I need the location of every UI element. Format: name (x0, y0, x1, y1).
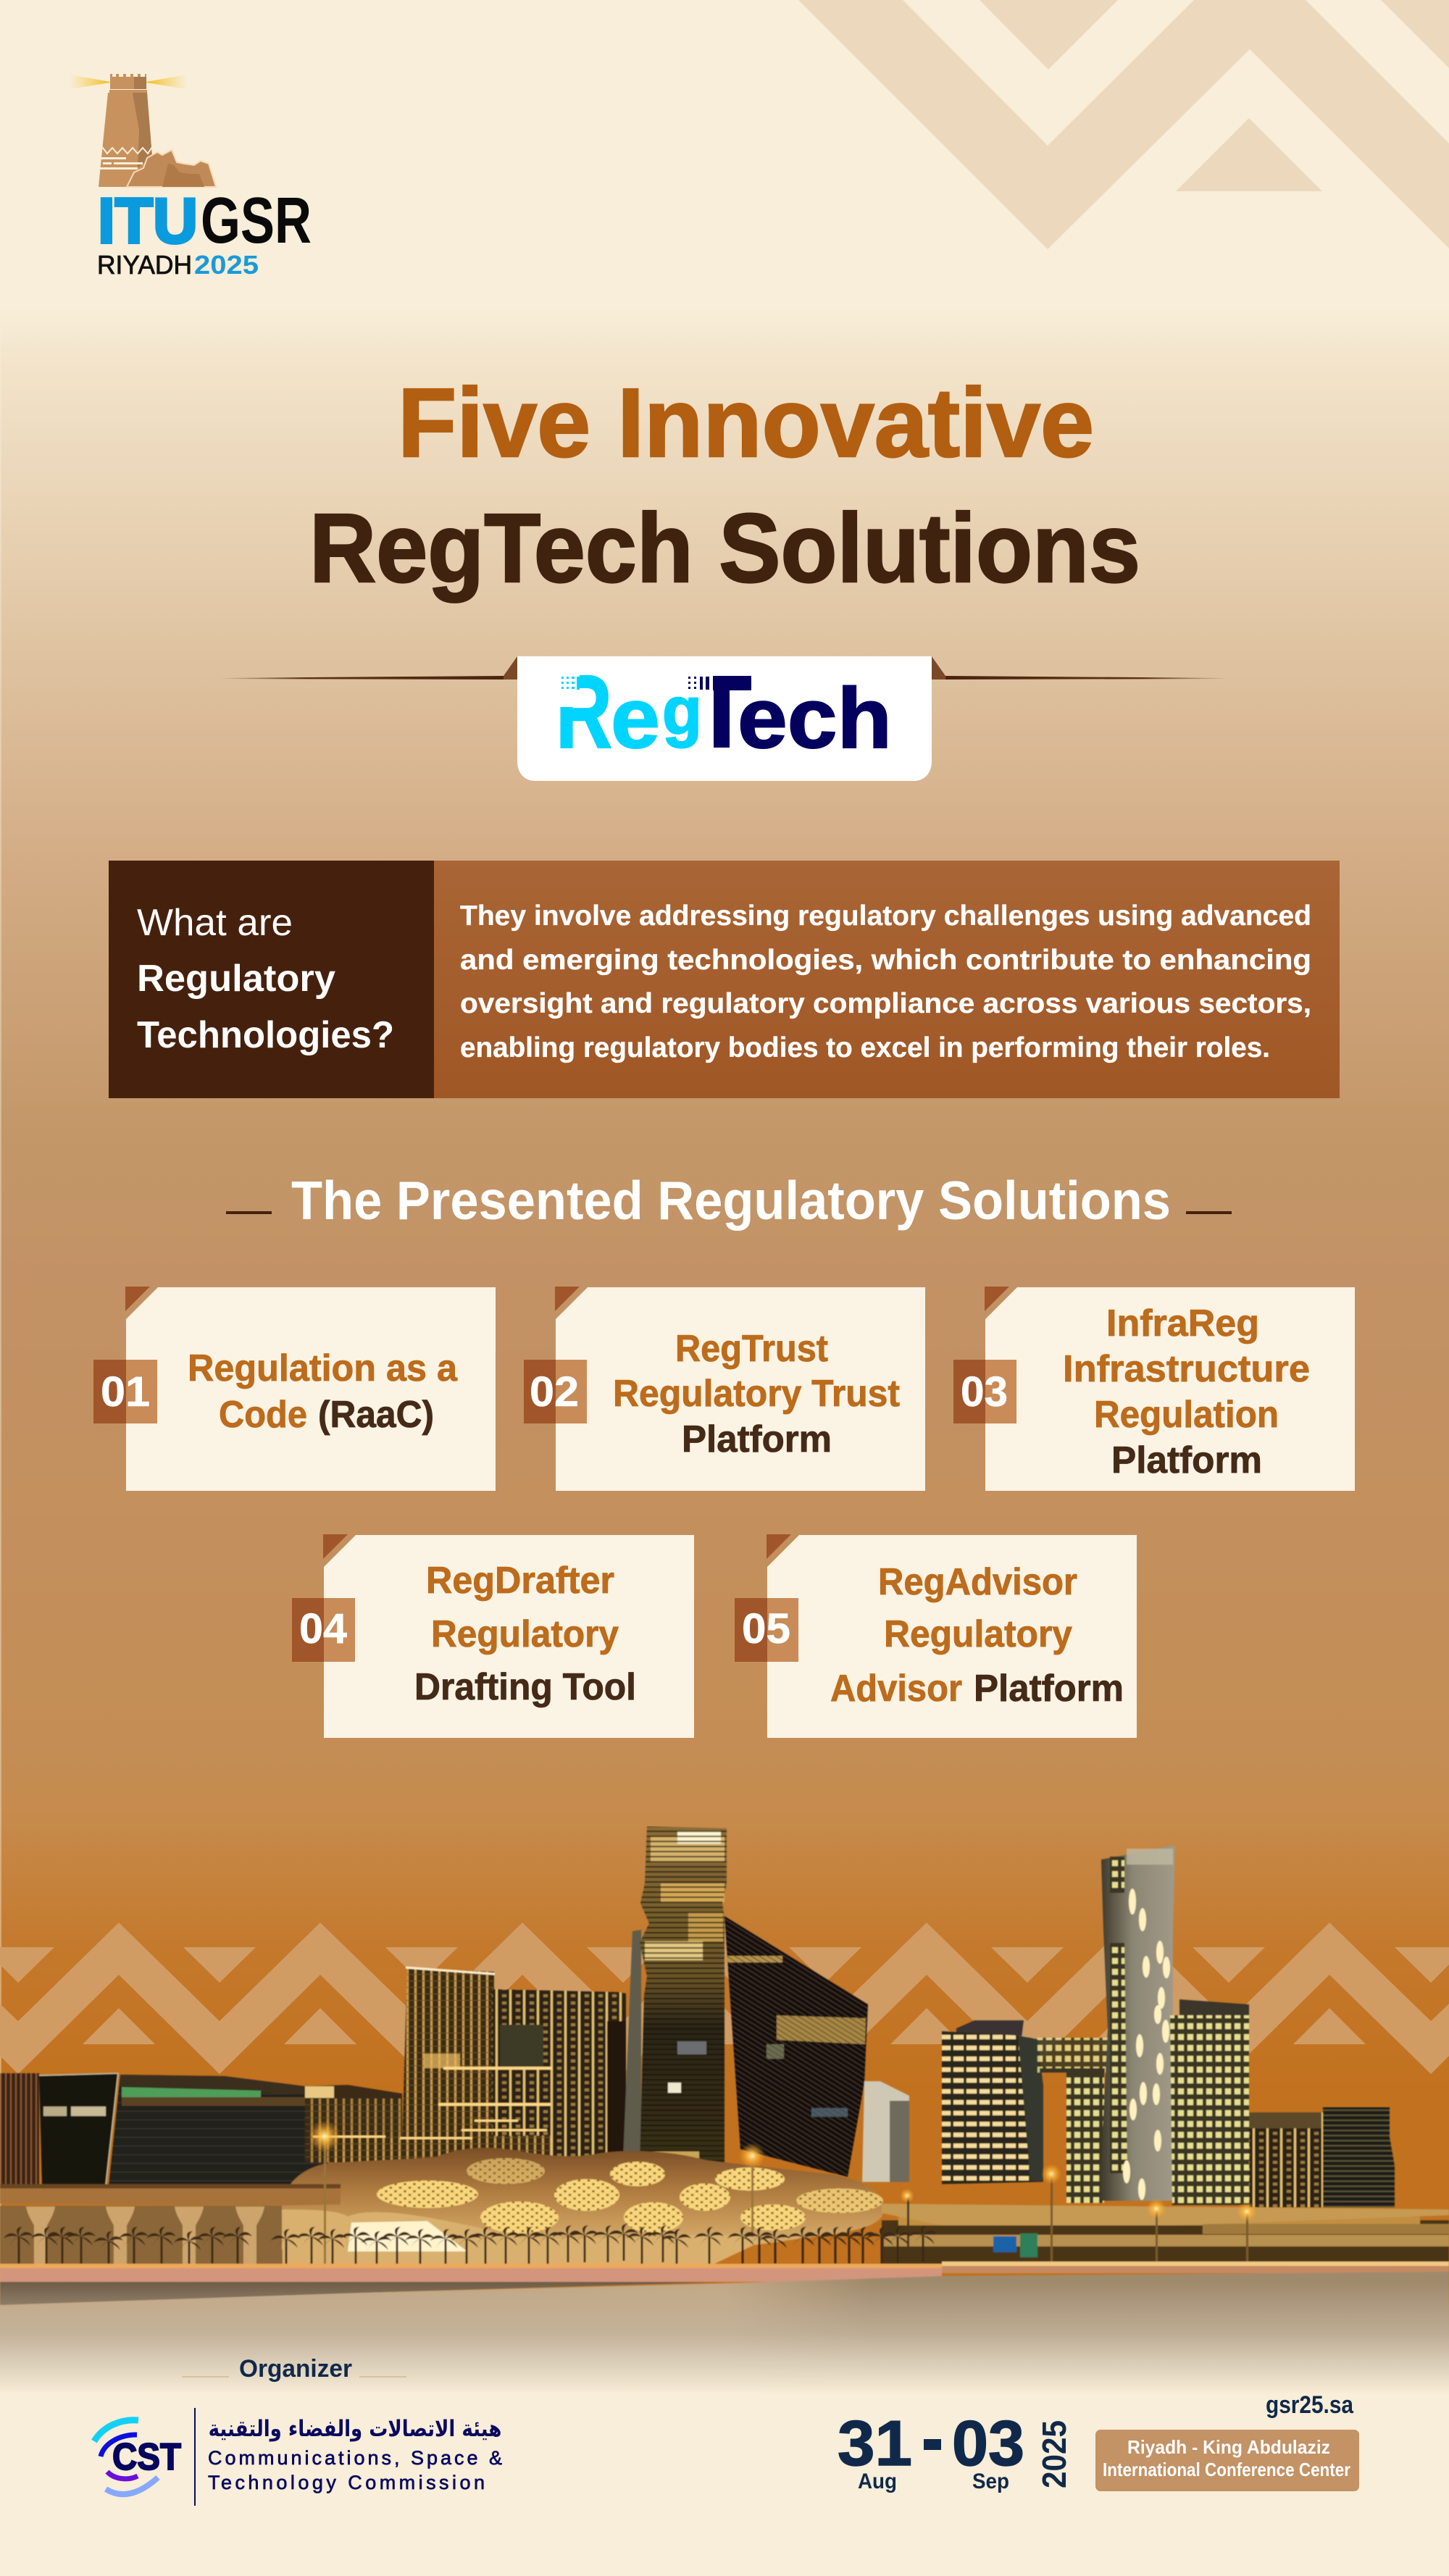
card text (1063, 1302, 1310, 1481)
card text (613, 1328, 900, 1460)
pale office block (862, 2081, 909, 2182)
card 02 (524, 1287, 925, 1491)
definition text: enabling regulatory bodies to excel in performing their roles. (460, 1032, 1270, 1063)
card text (830, 1561, 1124, 1710)
title line 1: Five Innovative (398, 368, 1094, 477)
RegTech logo tab (220, 653, 1228, 781)
logo: ITU GSR Riyadh 2025 (70, 74, 312, 280)
low right buildings (1249, 2107, 1395, 2207)
venue badge: Riyadh - King Abdulaziz (1127, 2436, 1330, 2458)
panel: what are regulatory technologies (109, 861, 1340, 1098)
road signs (993, 2233, 1037, 2257)
event date (838, 2407, 1073, 2493)
card text: RegDrafter (426, 1560, 614, 1602)
bottom fade to cream (0, 2260, 1449, 2395)
definition text: oversight and regulatory compliance across various sectors, (460, 988, 1311, 1019)
event date: 03 (952, 2407, 1024, 2479)
icon: CST logo: CST (112, 2436, 181, 2478)
logo: Reg: R (556, 653, 612, 770)
card text: RegTrust (675, 1328, 828, 1370)
card text: Code (219, 1394, 307, 1436)
organization name: Communications, Space & (208, 2447, 502, 2469)
card 04 (292, 1534, 694, 1738)
event date: 31 (838, 2407, 912, 2479)
definition text (460, 900, 1311, 1063)
card text: Drafting Tool (414, 1666, 636, 1708)
icon: CST logo (94, 2420, 181, 2494)
palm row (4, 2224, 938, 2268)
text: ITU: ITU (98, 185, 198, 256)
gold towers (313, 1967, 626, 2162)
event date: Sep (972, 2470, 1009, 2493)
venue badge (1095, 2430, 1359, 2491)
card text: Advisor (830, 1668, 962, 1710)
logo: Tech: ech (738, 671, 892, 766)
card text: Regulatory Trust (613, 1373, 900, 1415)
bridge tower (1037, 2038, 1108, 2203)
card text: Regulatory (884, 1613, 1072, 1655)
card text: Regulatory (431, 1613, 619, 1655)
text: GSR: GSR (201, 185, 312, 257)
organization name: هيئة الاتصالات والفضاء والتقنية (209, 2415, 501, 2442)
card text: Platform (1111, 1439, 1262, 1481)
event date: 2025 (1035, 2420, 1073, 2488)
question panel (109, 861, 434, 1098)
light trails and ground (0, 2262, 1449, 2405)
Riyadh skyline illustration (0, 1826, 1449, 2405)
question text: What are (137, 902, 293, 944)
twisted glass tower (623, 1826, 727, 2162)
card 03 (953, 1287, 1355, 1491)
event date: Aug (858, 2470, 897, 2493)
organization name: Technology Commission (208, 2472, 485, 2493)
card text: RegAdvisor (878, 1561, 1077, 1603)
dark lattice glass tower (724, 1916, 868, 2177)
card text: Infrastructure (1063, 1348, 1310, 1390)
metro station (282, 2148, 884, 2266)
card text: Regulation as a (188, 1347, 458, 1389)
question text: Technologies? (137, 1014, 394, 1056)
yellow window tower (1170, 1999, 1249, 2205)
elevated road right (882, 2204, 1449, 2225)
definition text: and emerging technologies, which contribute to enhancing (460, 945, 1311, 976)
logo: Reg (555, 653, 702, 770)
title (309, 368, 1140, 603)
venue badge: International Conference Center (1103, 2459, 1350, 2480)
organizer block (94, 2355, 502, 2506)
lower zigzag pattern (0, 1923, 1449, 2074)
logo: Reg: e (611, 671, 660, 766)
top-right zigzag pattern (798, 0, 1449, 249)
question text (137, 902, 394, 1056)
card text (188, 1347, 458, 1436)
website: gsr25.sa (1266, 2391, 1354, 2419)
street lamps (309, 2120, 1257, 2267)
number 01: 01 (101, 1368, 150, 1415)
definition description panel (434, 861, 1340, 1098)
number 02: 02 (530, 1368, 579, 1415)
card text: Platform (682, 1418, 832, 1460)
question text: Regulatory (137, 958, 335, 1000)
elevated road left (0, 2184, 341, 2265)
card text: InfraReg (1106, 1302, 1259, 1345)
text: RIYADH: RIYADH (97, 250, 192, 280)
card text: (RaaC) (318, 1394, 434, 1436)
windowed office tower (942, 2020, 1043, 2184)
card 05 (735, 1534, 1137, 1738)
card 01 (93, 1287, 496, 1491)
slim twisted tower with lit ovals (1099, 1845, 1175, 2201)
title line 2: RegTech Solutions (309, 493, 1140, 603)
section heading: The Presented Regulatory Solutions (291, 1170, 1171, 1231)
number 05: 05 (742, 1605, 790, 1652)
text: 2025: 2025 (194, 250, 259, 280)
card text (414, 1560, 636, 1708)
icon: lighthouse tower (70, 74, 216, 187)
definition text: They involve addressing regulatory challenges using advanced (460, 900, 1311, 932)
left office buildings (0, 2073, 402, 2186)
organization name (208, 2415, 502, 2493)
card text: Platform (974, 1668, 1124, 1710)
organizer label: Organizer (239, 2355, 352, 2383)
number 04: 04 (299, 1605, 347, 1652)
logo: Reg: g (662, 673, 702, 748)
number 03: 03 (961, 1368, 1008, 1415)
card text: Regulation (1094, 1394, 1279, 1436)
lower road structures (0, 2206, 1449, 2267)
